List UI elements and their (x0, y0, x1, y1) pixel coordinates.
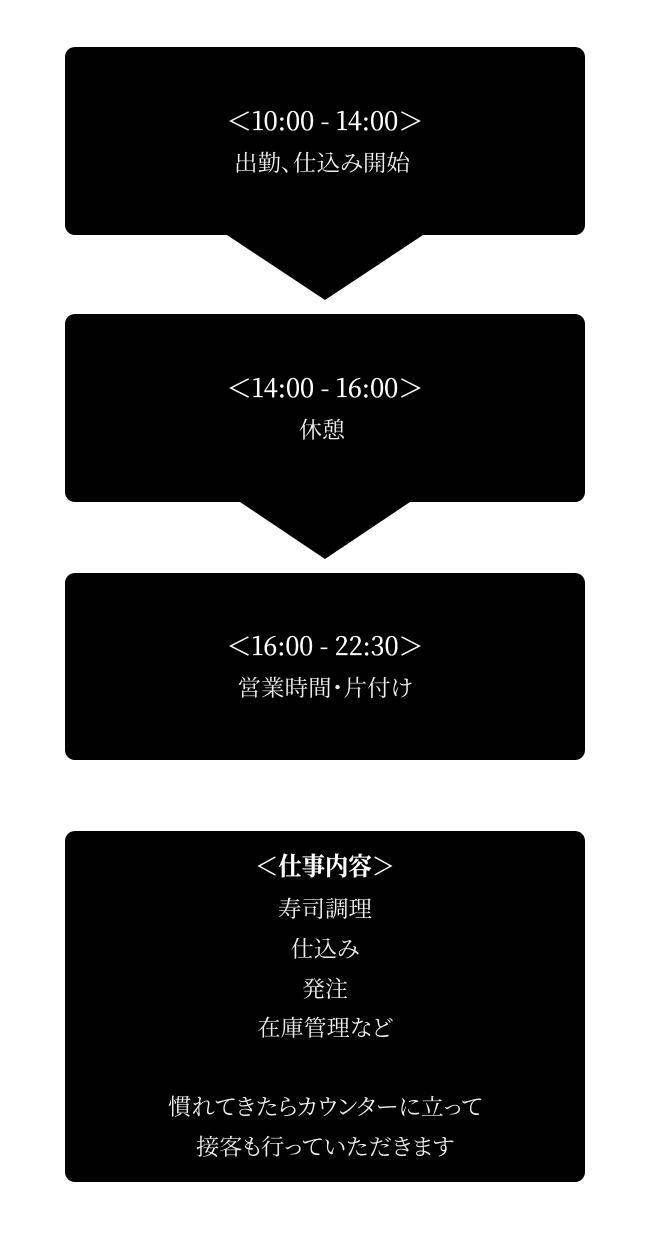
text: start of work: 出勤、仕込み開始 (234, 151, 412, 176)
text: sushi cooking: 寿司調理 (278, 897, 373, 922)
heading: 14:00-16:00: ＜14:00 - 16:00＞ (226, 369, 424, 405)
panel: 10:00-14:00 step (65, 47, 585, 300)
heading: job description: ＜仕事内容＞ (255, 847, 395, 883)
panel shape with down arrow (65, 314, 585, 559)
panel shape (65, 831, 585, 1182)
panel: 14:00-16:00 step (65, 314, 585, 559)
panel shape with down arrow (65, 47, 585, 300)
text: break: 休憩 (299, 418, 345, 443)
text: inventory management: 在庫管理など (258, 1016, 393, 1041)
panel shape (65, 573, 585, 760)
panel: 16:00-22:30 step (65, 573, 585, 760)
text: ordering: 発注 (302, 977, 348, 1002)
panel: job description (65, 831, 585, 1182)
text: counter service line 1: 慣れてきたらカウンターに立って (168, 1095, 482, 1120)
text: counter service line 2: 接客も行っていただきます (196, 1135, 454, 1160)
text: preparation: 仕込み (290, 937, 360, 962)
heading: 10:00-14:00: ＜10:00 - 14:00＞ (226, 102, 424, 138)
text: business hours and cleanup: 営業時間・片付け (238, 676, 412, 701)
heading: 16:00-22:30: ＜16:00 - 22:30＞ (226, 627, 424, 663)
